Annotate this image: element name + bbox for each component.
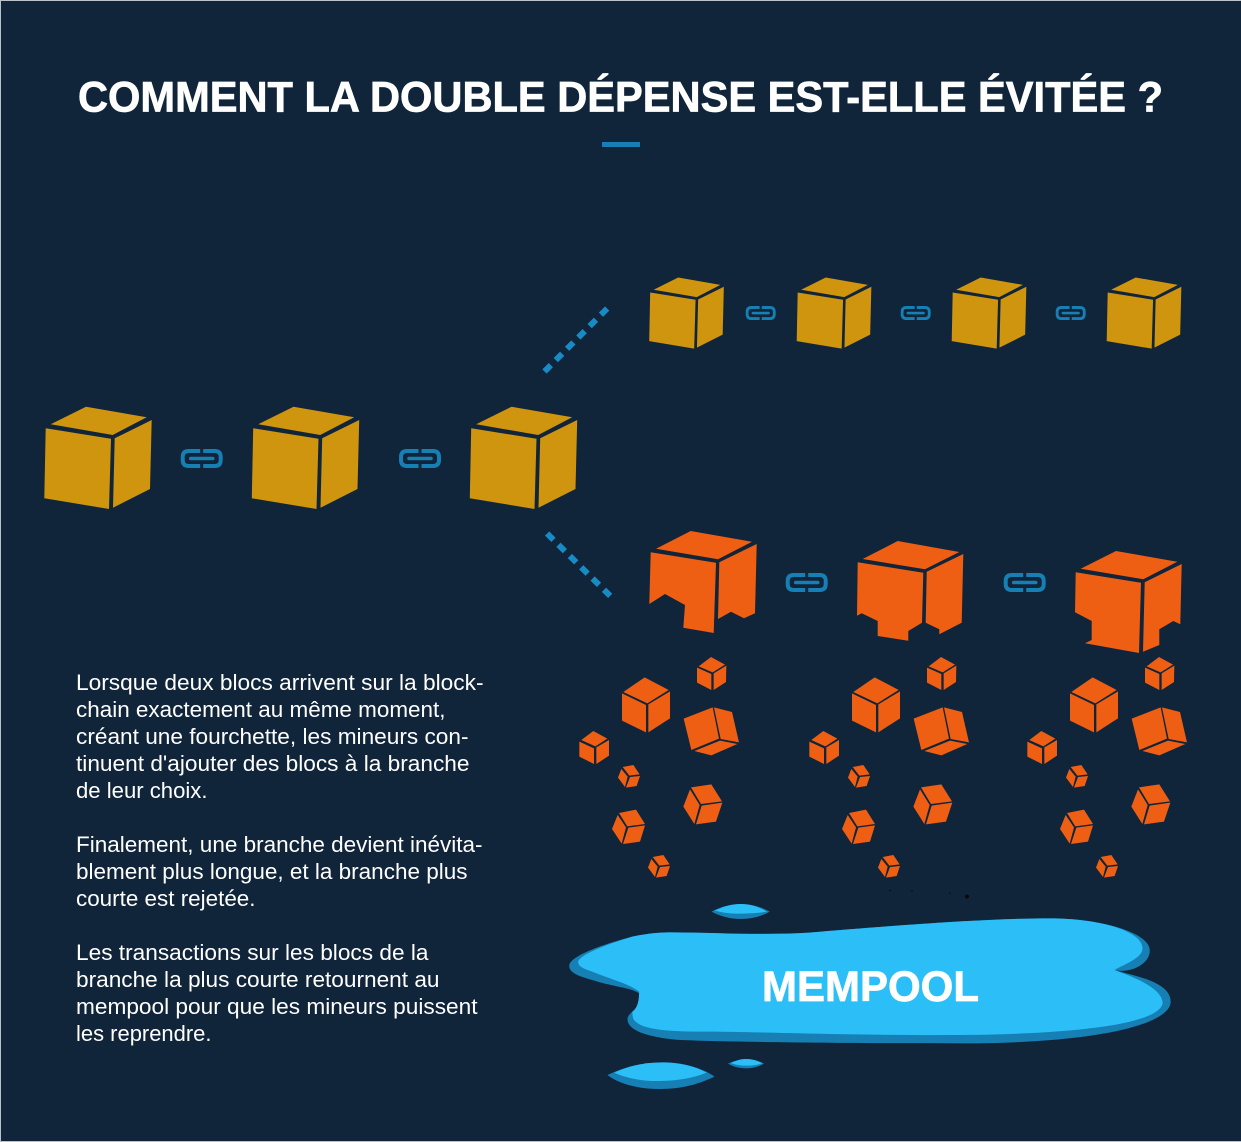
upper chain link 3 <box>1057 307 1084 319</box>
title underline <box>602 142 640 147</box>
gold block 1 <box>44 407 152 509</box>
text block: paragraph 3 <box>76 940 478 1046</box>
gold block 3 <box>470 407 577 509</box>
text block: paragraph 1: de leur choix. <box>76 778 208 803</box>
gold block 2 <box>252 407 359 509</box>
title: COMMENT LA DOUBLE DÉPENSE EST-ELLE ÉVITÉE ? <box>78 74 1163 122</box>
text block: paragraph 1: Lorsque deux blocs arrivent sur la block- <box>76 670 484 695</box>
chain link 2 <box>401 451 439 466</box>
lower chain link 1 <box>788 575 826 590</box>
falling cubes column 1 <box>579 657 739 878</box>
main chain: gold blocks <box>44 407 577 509</box>
text block: paragraph 2 <box>76 832 482 911</box>
lower branch: crumbling orange block 2 <box>857 541 963 641</box>
lower branch: crumbling orange block 3 <box>1075 551 1182 653</box>
text block: paragraph 1: tinuent d'ajouter des blocs à la branche <box>76 751 470 776</box>
text block: paragraph 3: les reprendre. <box>76 1021 212 1046</box>
text block: paragraph 3: Les transactions sur les blocs de la <box>76 940 429 965</box>
mempool label: MEMPOOL <box>762 963 979 1011</box>
text block: paragraph 3: branche la plus courte retournent au <box>76 967 439 992</box>
upper branch: gold blocks <box>649 277 1181 349</box>
upper chain link 2 <box>902 307 929 319</box>
upper chain link 1 <box>747 307 774 319</box>
upper block 1 <box>649 277 724 349</box>
droplet bottom small <box>728 1059 764 1068</box>
dotted line: upper fork <box>544 308 607 372</box>
mempool puddle <box>569 918 1171 1043</box>
text block: paragraph 1 <box>76 670 484 803</box>
text block: paragraph 2: Finalement, une branche devient inévita- <box>76 832 482 857</box>
text block: paragraph 2: courte est rejetée. <box>76 886 255 911</box>
text block: paragraph 2: blement plus longue, et la branche plus <box>76 859 468 884</box>
lower chain link 2 <box>1006 575 1044 590</box>
falling cubes column 3 <box>1027 657 1187 878</box>
dotted line: lower fork <box>547 534 610 596</box>
specks above pool <box>889 890 969 898</box>
falling cubes column 2 <box>809 657 969 878</box>
droplet bottom large <box>607 1062 715 1089</box>
chain link 1 <box>183 451 221 466</box>
upper block 4 <box>1107 277 1181 349</box>
lower branch: crumbling orange block 1 <box>649 531 757 633</box>
text block: paragraph 3: mempool pour que les mineurs puissent <box>76 994 478 1019</box>
droplet top <box>711 904 770 919</box>
text block: paragraph 1: chain exactement au même moment, <box>76 697 446 722</box>
upper block 3 <box>952 277 1026 349</box>
upper block 2 <box>797 277 871 349</box>
text block: paragraph 1: créant une fourchette, les mineurs con- <box>76 724 468 749</box>
